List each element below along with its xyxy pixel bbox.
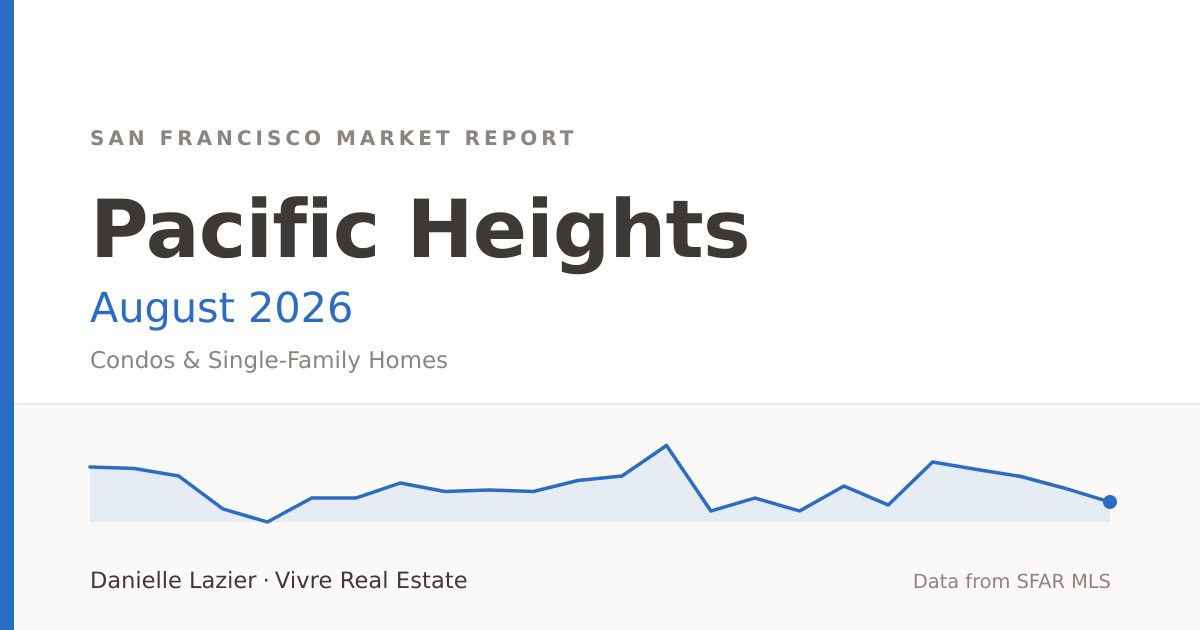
agent credit: Danielle Lazier · Vivre Real Estate	[90, 568, 468, 594]
chart area fill	[90, 446, 1110, 522]
footer band	[0, 403, 1200, 630]
title: Pacific Heights	[90, 183, 750, 276]
property types: Condos & Single-Family Homes	[90, 348, 448, 374]
chart line	[90, 446, 1110, 522]
date subtitle: August 2026	[90, 284, 353, 332]
eyebrow label: SAN FRANCISCO MARKET REPORT	[90, 126, 577, 150]
accent bar	[0, 0, 14, 630]
latest data point	[1103, 495, 1117, 509]
data source: Data from SFAR MLS	[913, 570, 1111, 593]
sparkline chart	[88, 444, 1117, 524]
